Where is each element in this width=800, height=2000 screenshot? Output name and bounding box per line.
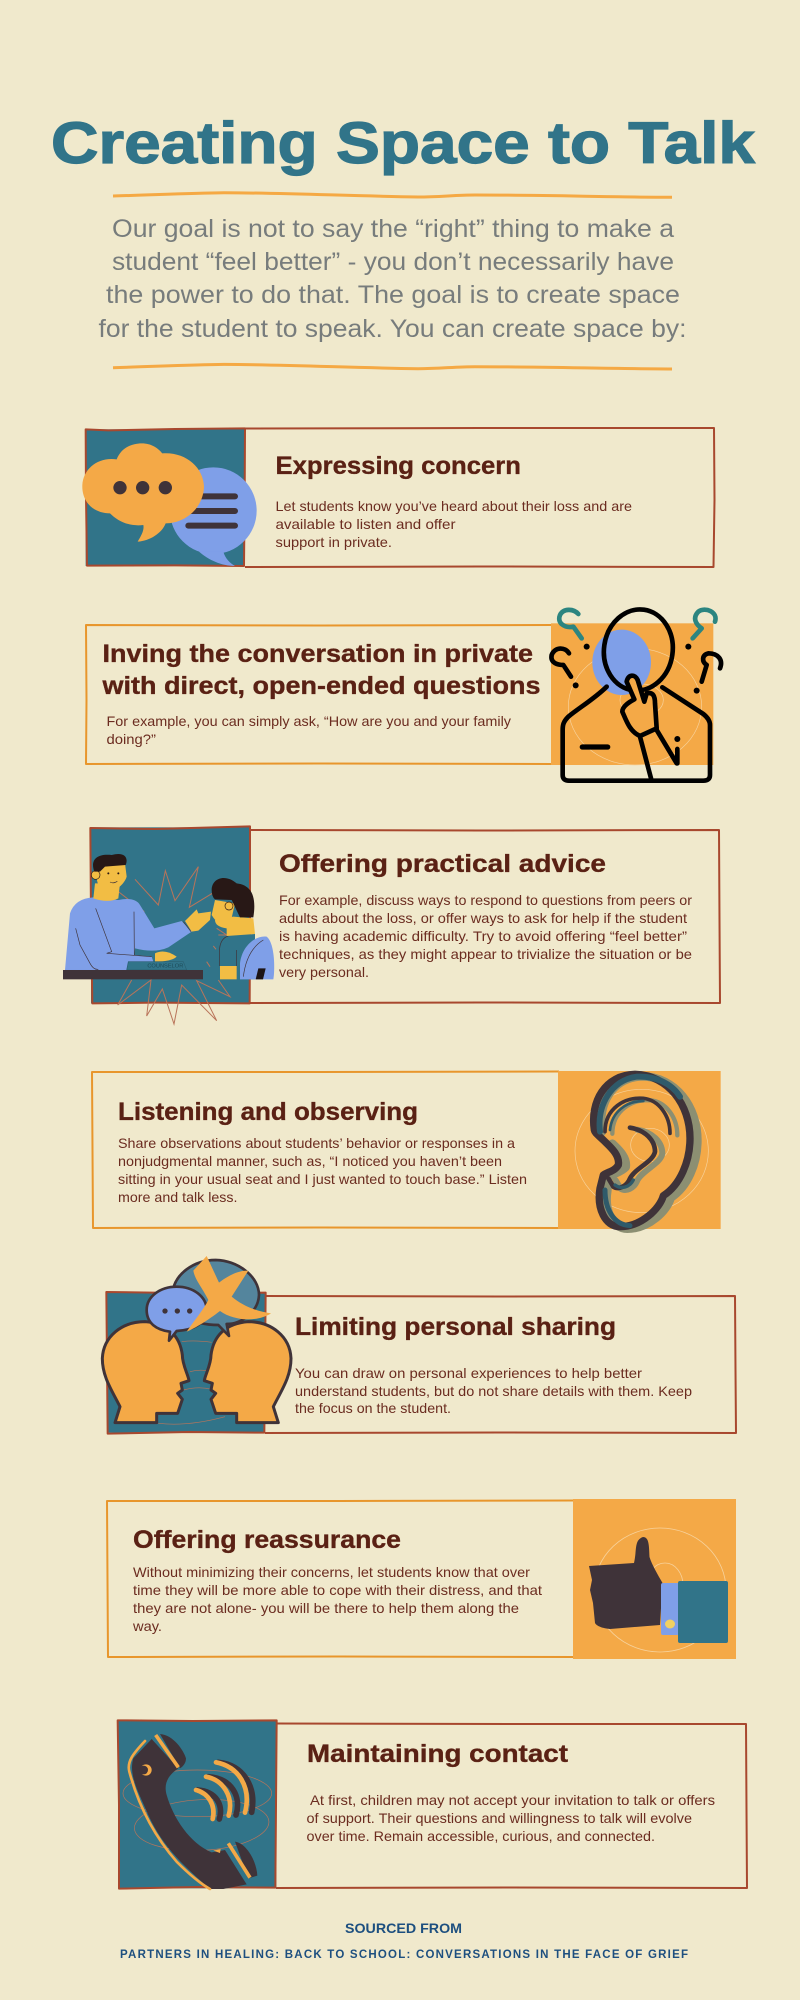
heading: offering reassurance: Offering reassurance [133,1526,401,1554]
body: inviting the conversation [106,713,511,747]
body: offering reassurance: way. [132,1618,162,1634]
panel: practical advice [63,826,720,1024]
intro text: the power to do that. The goal is to create space [106,281,680,309]
body: listening and observing [118,1135,527,1205]
intro text: for the student to speak. You can create space by: [98,315,686,343]
body: offering reassurance: they are not alone- you will be there to help them along the [133,1600,519,1616]
body: inviting the conversation: For example, you can simply ask, “How are you and your family [106,713,511,729]
icon: person with question marks [551,605,721,781]
body: listening and observing: sitting in your usual seat and I just wanted to touch base.” Listen [118,1171,527,1187]
body: expressing concern: support in private. [276,534,392,550]
body: listening and observing: more and talk less. [118,1189,238,1205]
body: inviting the conversation: doing?” [106,731,156,747]
panel: inviting the conversation [86,605,721,781]
body: practical advice [279,892,692,980]
body: maintaining contact: of support. Their questions and willingness to talk will evolve [306,1810,692,1826]
icon: telephone [118,1720,277,1889]
body: limiting personal sharing: understand students, but do not share details with them. Keep [295,1383,692,1399]
icon: ear [558,1071,721,1229]
icon: counselor and student [63,826,274,1024]
icon: two heads with speech bubbles [102,1256,291,1434]
body: practical advice: is having academic difficulty. Try to avoid offering “feel better” [279,928,687,944]
body: listening and observing: Share observations about students’ behavior or responses in a [118,1135,515,1151]
heading: inviting the conversation: Inving the conversation in private [102,640,533,668]
heading: listening and observing: Listening and observing [118,1098,418,1126]
intro text [98,215,686,343]
body: expressing concern: available to listen and offer [276,516,456,532]
title: Creating Space to Talk [51,111,756,176]
body: practical advice: very personal. [279,964,369,980]
heading: limiting personal sharing: Limiting personal sharing [295,1313,616,1341]
source citation: PARTNERS IN HEALING: BACK TO SCHOOL: CONVERSATIONS IN THE FACE OF GRIEF [120,1949,688,1961]
heading: practical advice: Offering practical advice [279,850,606,878]
body: limiting personal sharing [295,1365,692,1416]
panel: maintaining contact [118,1720,747,1889]
panel: expressing concern [82,428,714,567]
heading: expressing concern: Expressing concern [276,452,521,480]
body: offering reassurance [132,1564,542,1634]
body: offering reassurance: Without minimizing their concerns, let students know that over [133,1564,530,1580]
body: expressing concern: Let students know you’ve heard about their loss and are [276,498,632,514]
body: maintaining contact [306,1792,715,1844]
icon: counselor and student: COUNSELOR [147,964,183,970]
body: practical advice: techniques, as they might appear to trivialize the situation or be [279,946,692,962]
body: maintaining contact: over time. Remain accessible, curious, and connected. [306,1828,655,1844]
heading: maintaining contact: Maintaining contact [307,1740,569,1768]
body: practical advice: adults about the loss, or offer ways to ask for help if the student [279,910,687,926]
heading: inviting the conversation: with direct, open-ended questions [101,672,540,700]
body: listening and observing: nonjudgmental manner, such as, “I noticed you haven’t been [118,1153,502,1169]
body: offering reassurance: time they will be more able to cope with their distress, and that [133,1582,542,1598]
source heading: SOURCED FROM [345,1920,462,1936]
body: maintaining contact: At first, children may not accept your invitation to talk or offers [310,1792,715,1808]
icon: thumbs up [573,1499,736,1659]
panel: listening and observing [92,1071,721,1229]
heading: inviting the conversation [101,640,540,700]
body: limiting personal sharing: the focus on the student. [295,1400,451,1416]
body: expressing concern [276,498,632,550]
body: practical advice: For example, discuss ways to respond to questions from peers or [279,892,692,908]
panel: offering reassurance [107,1499,736,1659]
intro text: Our goal is not to say the “right” thing to make a [112,215,674,243]
body: limiting personal sharing: You can draw on personal experiences to help better [295,1365,642,1381]
icon: speech bubbles [82,428,257,566]
panel: limiting personal sharing [102,1256,736,1434]
intro text: student “feel better” - you don’t necessarily have [112,248,674,276]
